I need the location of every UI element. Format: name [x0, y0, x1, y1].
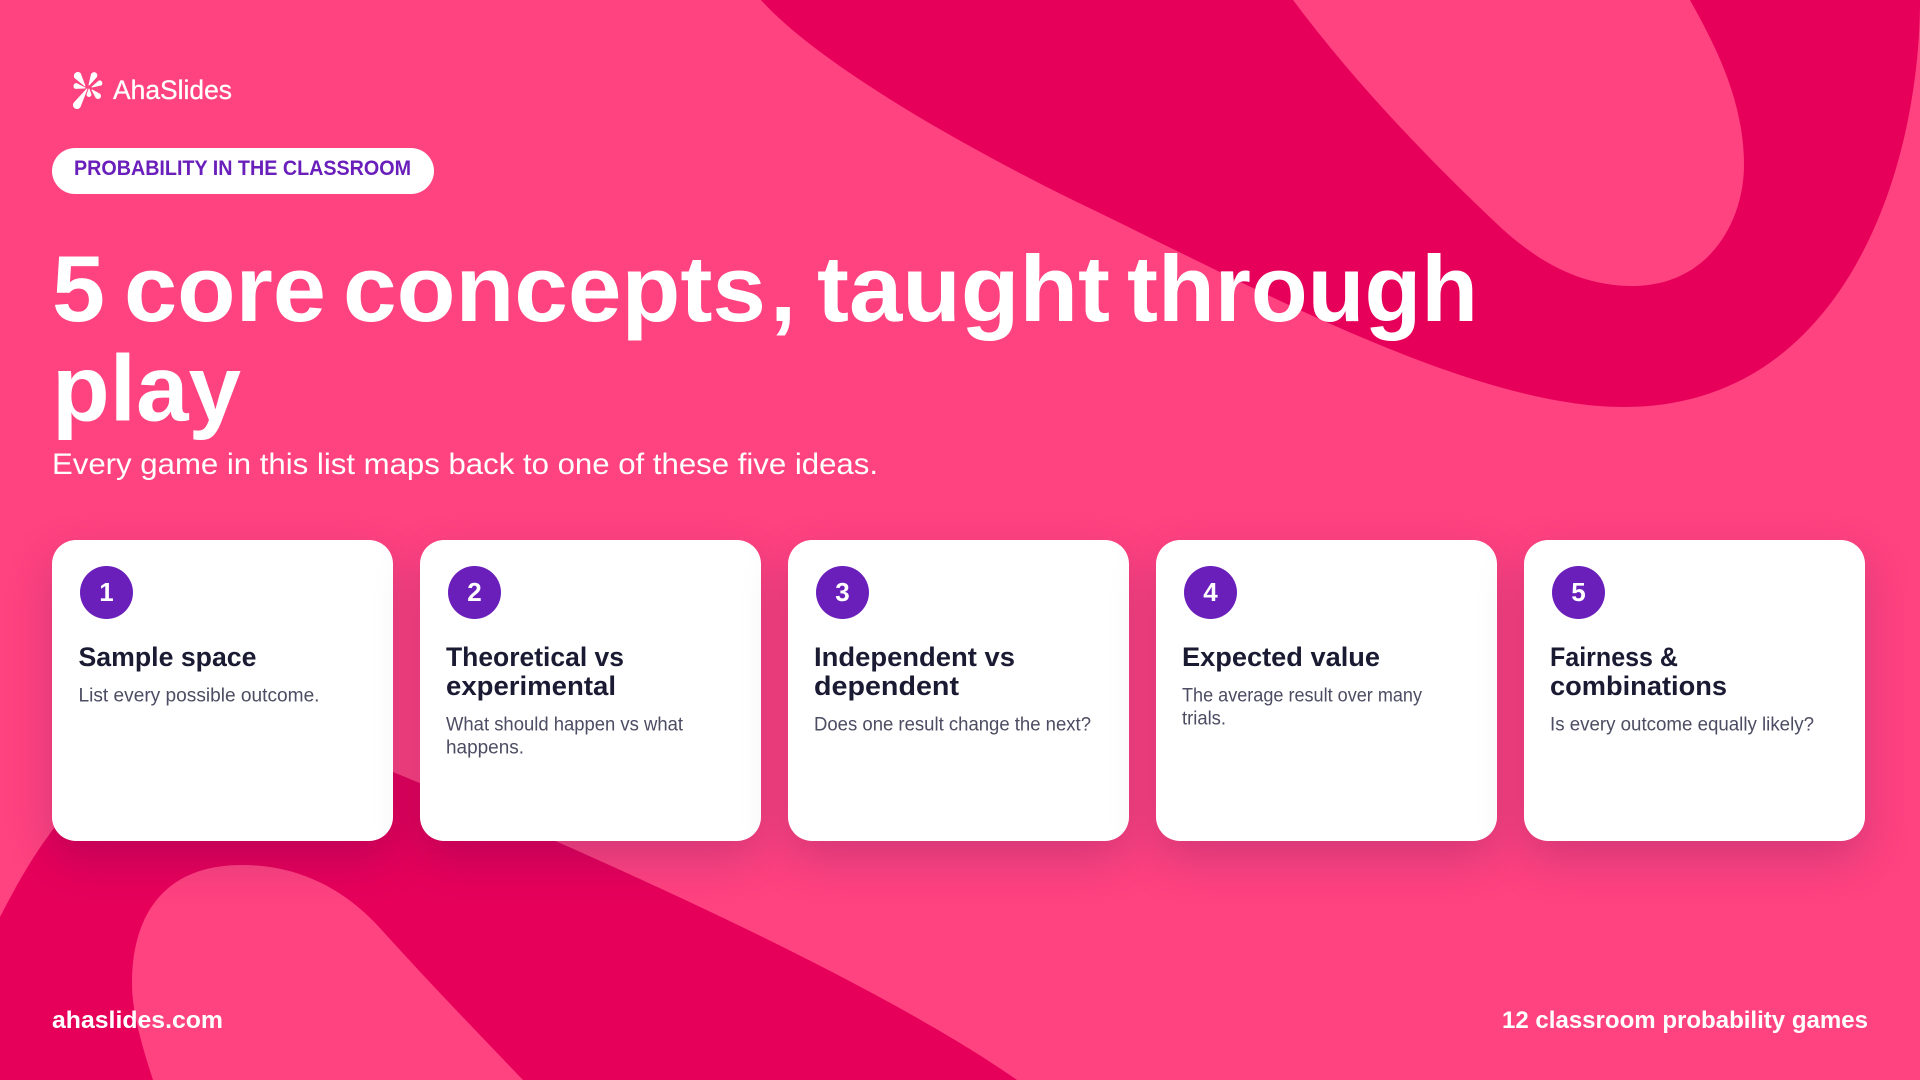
- number badge 5: [1552, 566, 1605, 619]
- icon: AhaSlides starburst: [73, 73, 102, 109]
- card heading: [446, 642, 624, 701]
- number badge 2: [448, 566, 501, 619]
- title: ,: [770, 236, 796, 341]
- number badge 1: [80, 566, 133, 619]
- title: concepts: [343, 236, 766, 341]
- card description: What should happen vs what: [446, 714, 684, 736]
- card description: [446, 714, 684, 758]
- background blob: top right: [761, 0, 1920, 407]
- background blob: bottom left: [0, 725, 1017, 1080]
- card description: List every possible outcome.: [78, 686, 320, 706]
- number badge 4: 4: [1203, 577, 1218, 607]
- card description: The average result over many: [1182, 686, 1422, 706]
- card heading: Theoretical vs: [446, 642, 624, 672]
- title: taught: [817, 236, 1110, 341]
- number badge 2: 2: [467, 577, 482, 607]
- panel: card 2 theoretical vs experimental: [420, 540, 761, 841]
- number badge 1: 1: [99, 577, 114, 607]
- eyebrow pill: PROBABILITY IN THE CLASSROOM: [74, 157, 411, 180]
- panel: card 4 expected value: [1156, 540, 1497, 841]
- card heading: [1550, 642, 1727, 701]
- footer: website: ahaslides.com: [52, 1007, 223, 1034]
- footer: caption: 12 classroom probability games: [1502, 1007, 1868, 1034]
- number badge 3: 3: [835, 577, 850, 607]
- card heading: Sample space: [78, 642, 256, 672]
- card description: trials.: [1182, 708, 1226, 730]
- title: through: [1127, 236, 1478, 341]
- title: [52, 236, 1478, 440]
- logo: [73, 73, 232, 109]
- card heading: Fairness &: [1550, 642, 1678, 672]
- subtitle: Every game in this list maps back to one of these five ideas.: [52, 448, 878, 481]
- card heading: experimental: [446, 671, 616, 701]
- title: play: [52, 336, 241, 440]
- card heading: Independent vs: [814, 642, 1015, 672]
- number badge 3: [816, 566, 869, 619]
- card heading: combinations: [1550, 671, 1727, 701]
- card description: Is every outcome equally likely?: [1550, 714, 1814, 736]
- card description: [1182, 686, 1422, 730]
- title: core: [124, 236, 326, 341]
- number badge 5: 5: [1571, 577, 1586, 607]
- eyebrow pill: [52, 148, 434, 194]
- logo wordmark: AhaSlides: [113, 75, 232, 105]
- card heading: dependent: [814, 671, 959, 701]
- card heading: Expected value: [1182, 642, 1380, 672]
- card description: happens.: [446, 738, 524, 758]
- number badge 4: [1184, 566, 1237, 619]
- card heading: [814, 642, 1015, 701]
- panel: card 1 sample space: [52, 540, 393, 841]
- title: 5: [52, 236, 105, 341]
- panel: card 3 independent vs dependent: [788, 540, 1129, 841]
- card description: Does one result change the next?: [814, 714, 1091, 736]
- panel: card 5 fairness and combinations: [1524, 540, 1865, 841]
